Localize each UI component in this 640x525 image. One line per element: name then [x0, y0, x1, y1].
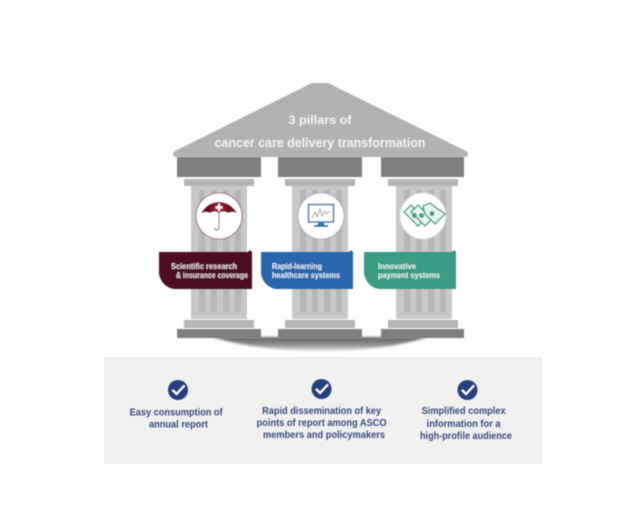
benefit: easy consumption [130, 380, 225, 430]
ribbon: scientific research [159, 250, 252, 289]
icon: computer monitor [298, 193, 344, 239]
icon: check [458, 380, 478, 400]
benefit: easy consumption: Easy consumption of [130, 408, 223, 418]
ribbon: rapid-learning [261, 250, 353, 289]
benefit: rapid dissemination: Rapid dissemination of key [262, 406, 382, 417]
title [214, 115, 426, 150]
ribbon: rapid-learning: healthcare systems [272, 270, 340, 280]
temple roof pediment [173, 83, 468, 157]
panel: benefits background [104, 357, 542, 464]
ribbon: innovative payment: Innovative [378, 261, 416, 271]
benefit: simplified information [420, 380, 512, 442]
benefit: rapid dissemination: members and policymakers [263, 430, 385, 441]
floor shadow under temple [212, 337, 428, 351]
benefit: simplified information: information for a [427, 419, 501, 430]
icon: check [312, 379, 332, 399]
title: cancer care delivery transformation [214, 136, 426, 150]
ribbon: innovative payment [364, 250, 456, 289]
pillar 3 [381, 157, 464, 338]
ribbon: scientific research: & insurance coverage [176, 270, 248, 280]
ribbon: innovative payment: payment systems [378, 270, 440, 280]
icon: umbrella [196, 193, 242, 239]
benefit: simplified information: Simplified complex [422, 406, 506, 417]
icon: check [168, 380, 188, 400]
pillar 1 [177, 157, 261, 338]
icon: banknotes [400, 193, 446, 239]
benefit: rapid dissemination [257, 379, 389, 441]
pillar 2 [278, 157, 362, 338]
ribbon: rapid-learning: Rapid-learning [272, 261, 322, 271]
benefit: simplified information: high-profile audience [420, 431, 512, 442]
benefit: rapid dissemination: points of report among ASCO [257, 418, 387, 429]
ribbon: scientific research: Scientific research [171, 261, 237, 271]
title: 3 pillars of [288, 115, 352, 127]
benefit: easy consumption: annual report [149, 420, 209, 430]
